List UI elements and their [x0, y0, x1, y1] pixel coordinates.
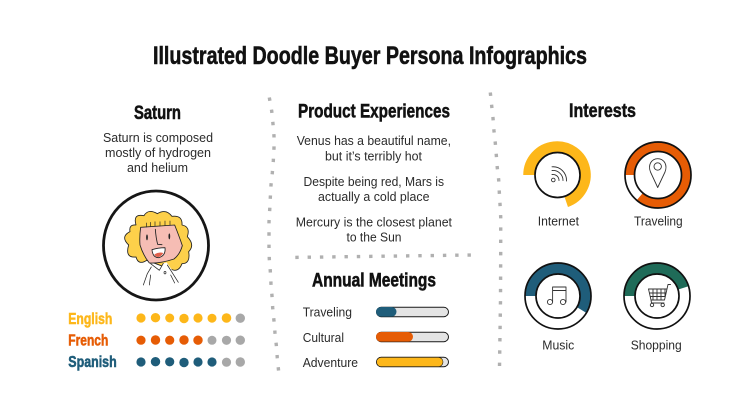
- title: Illustrated Doodle Buyer Persona Infographics: [153, 42, 587, 70]
- text block: Saturn description: [103, 131, 213, 175]
- icon: music note: [547, 287, 566, 305]
- panel: Product Experiences: [296, 101, 453, 245]
- text block: Mercury: to the Sun: [346, 231, 402, 245]
- rating: English dots: [136, 313, 245, 323]
- text block: Venus: but it’s terribly hot: [325, 150, 423, 164]
- donut: Traveling: [625, 142, 691, 229]
- panel: Annual Meetings: [303, 271, 448, 370]
- text block: Mercury: [296, 216, 453, 245]
- icon: wifi: [552, 167, 567, 182]
- heading: Product Experiences: Product Experiences: [298, 101, 450, 122]
- text block: Venus: Venus has a beautiful name,: [297, 134, 451, 148]
- text block: Saturn description: and helium: [127, 161, 188, 175]
- bar row: Cultural: [303, 331, 448, 345]
- donut: Music: Music: [542, 338, 574, 352]
- label: Spanish: Spanish: [68, 354, 117, 371]
- bar row: Traveling: [303, 306, 448, 320]
- icon: shopping cart: [648, 284, 670, 307]
- rating: Spanish dots: [136, 357, 245, 367]
- label: English: English: [68, 311, 112, 328]
- bar row: Adventure: [303, 356, 448, 370]
- donut: Music: [525, 263, 591, 352]
- text block: Saturn description: Saturn is composed: [103, 131, 213, 145]
- donut: Internet: [529, 147, 585, 229]
- heading: Saturn: Saturn: [134, 103, 181, 124]
- text block: Mars: actually a cold place: [318, 190, 430, 204]
- text block: Saturn description: mostly of hydrogen: [105, 146, 211, 160]
- panel: Saturn profile: [68, 103, 245, 371]
- rating: French dots: [136, 335, 245, 345]
- icon: map pin: [650, 159, 666, 188]
- text block: Mars: [304, 175, 444, 204]
- label: French: French: [68, 333, 108, 350]
- text block: Venus: [297, 134, 451, 164]
- text block: Mars: Despite being red, Mars is: [304, 175, 444, 189]
- icon: persona avatar: [104, 191, 208, 300]
- donut: Shopping: [624, 263, 690, 352]
- panel: Interests: [525, 101, 691, 352]
- text block: Mercury: Mercury is the closest planet: [296, 216, 453, 230]
- heading: Annual Meetings: Annual Meetings: [312, 271, 436, 292]
- bar row: Traveling: Traveling: [303, 306, 352, 320]
- donut: Internet: Internet: [538, 215, 580, 229]
- donut: Traveling: Traveling: [634, 215, 683, 229]
- bar row: Adventure: Adventure: [303, 356, 358, 370]
- heading: Interests: Interests: [569, 101, 636, 122]
- language skills: [68, 311, 245, 371]
- bar row: Cultural: Cultural: [303, 331, 344, 345]
- donut: Shopping: Shopping: [631, 338, 682, 352]
